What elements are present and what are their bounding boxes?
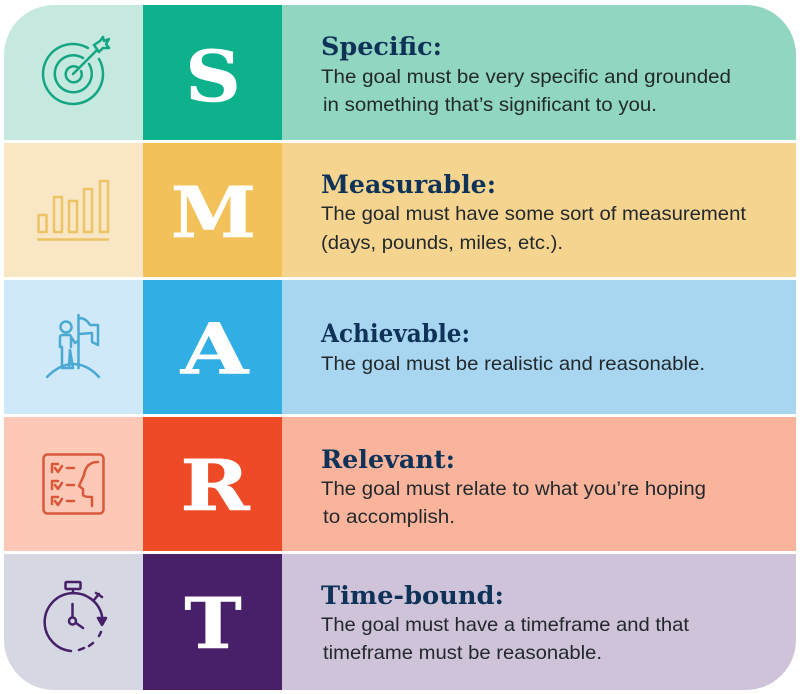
text: Measurable description: The goal must have some sort of measurement bbox=[321, 203, 747, 225]
letter M: M bbox=[171, 172, 256, 254]
heading: Measurable: Measurable: bbox=[321, 170, 496, 199]
text: Specific description: The goal must be very specific and grounded bbox=[321, 66, 731, 88]
letter R: R bbox=[180, 445, 251, 527]
panel: relevant bbox=[0, 417, 800, 551]
icon: checklist and face profile bbox=[44, 454, 104, 514]
text: Time-bound description: The goal must have a timeframe and that bbox=[321, 614, 690, 636]
heading: Time-bound: Time-bound: bbox=[321, 581, 504, 610]
text: Achievable description: The goal must be realistic and reasonable. bbox=[321, 353, 705, 375]
panel: time-bound bbox=[0, 554, 800, 694]
text: Specific description: in something that’s significant to you. bbox=[323, 94, 657, 116]
heading: Specific: Specific: bbox=[321, 32, 442, 61]
text: Measurable description: (days, pounds, miles, etc.). bbox=[321, 232, 563, 254]
text: Relevant description: The goal must relate to what you’re hoping bbox=[321, 478, 706, 500]
text: Time-bound description: timeframe must be reasonable. bbox=[323, 642, 602, 664]
heading: Relevant: Relevant: bbox=[321, 445, 455, 474]
icon: stopwatch bbox=[45, 582, 106, 651]
heading: Achievable: Achievable: bbox=[320, 319, 470, 348]
icon: target with arrow bbox=[43, 37, 109, 104]
panel: specific bbox=[0, 0, 800, 140]
panel: achievable bbox=[0, 280, 800, 414]
letter A: A bbox=[180, 308, 250, 390]
letter S: S bbox=[185, 36, 241, 118]
icon: person with flag on hill bbox=[47, 315, 99, 377]
text: Relevant description: to accomplish. bbox=[323, 506, 455, 528]
panel: measurable bbox=[0, 143, 800, 277]
icon: bar chart bbox=[38, 181, 108, 240]
letter T: T bbox=[184, 583, 242, 665]
